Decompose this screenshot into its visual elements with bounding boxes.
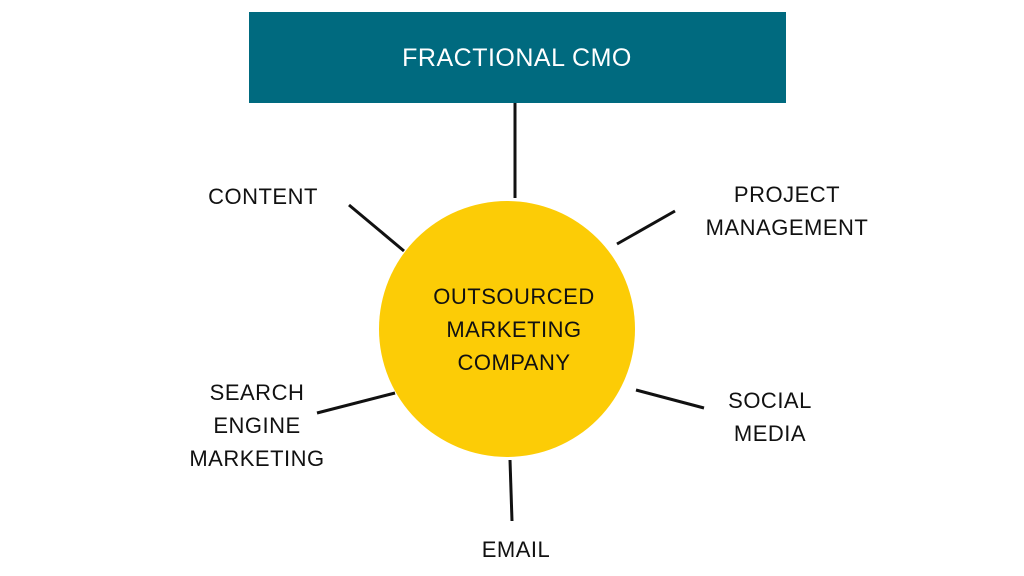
label: social media	[728, 388, 812, 446]
label: social media: MEDIA	[734, 421, 806, 446]
label: project management: MANAGEMENT	[706, 215, 868, 240]
connector: project management	[617, 211, 675, 244]
connector: top	[514, 103, 516, 198]
label: project management: PROJECT	[734, 182, 840, 207]
title box	[249, 12, 786, 103]
connector: email	[510, 460, 512, 521]
label: project management	[706, 182, 868, 240]
center circle	[379, 201, 635, 457]
connector: social media	[636, 390, 704, 408]
label: social media: SOCIAL	[728, 388, 812, 413]
connector: content	[349, 205, 404, 251]
center circle: MARKETING	[446, 317, 582, 342]
label: search engine marketing: MARKETING	[189, 446, 325, 471]
center circle: OUTSOURCED	[433, 284, 595, 309]
center circle: COMPANY	[457, 350, 571, 375]
connector: search engine marketing	[317, 393, 395, 413]
label: email: EMAIL	[482, 537, 550, 562]
label: search engine marketing	[189, 380, 325, 471]
title box: FRACTIONAL CMO	[402, 44, 632, 72]
label: search engine marketing: SEARCH	[210, 380, 304, 405]
label: search engine marketing: ENGINE	[213, 413, 301, 438]
label: content: CONTENT	[208, 184, 318, 209]
